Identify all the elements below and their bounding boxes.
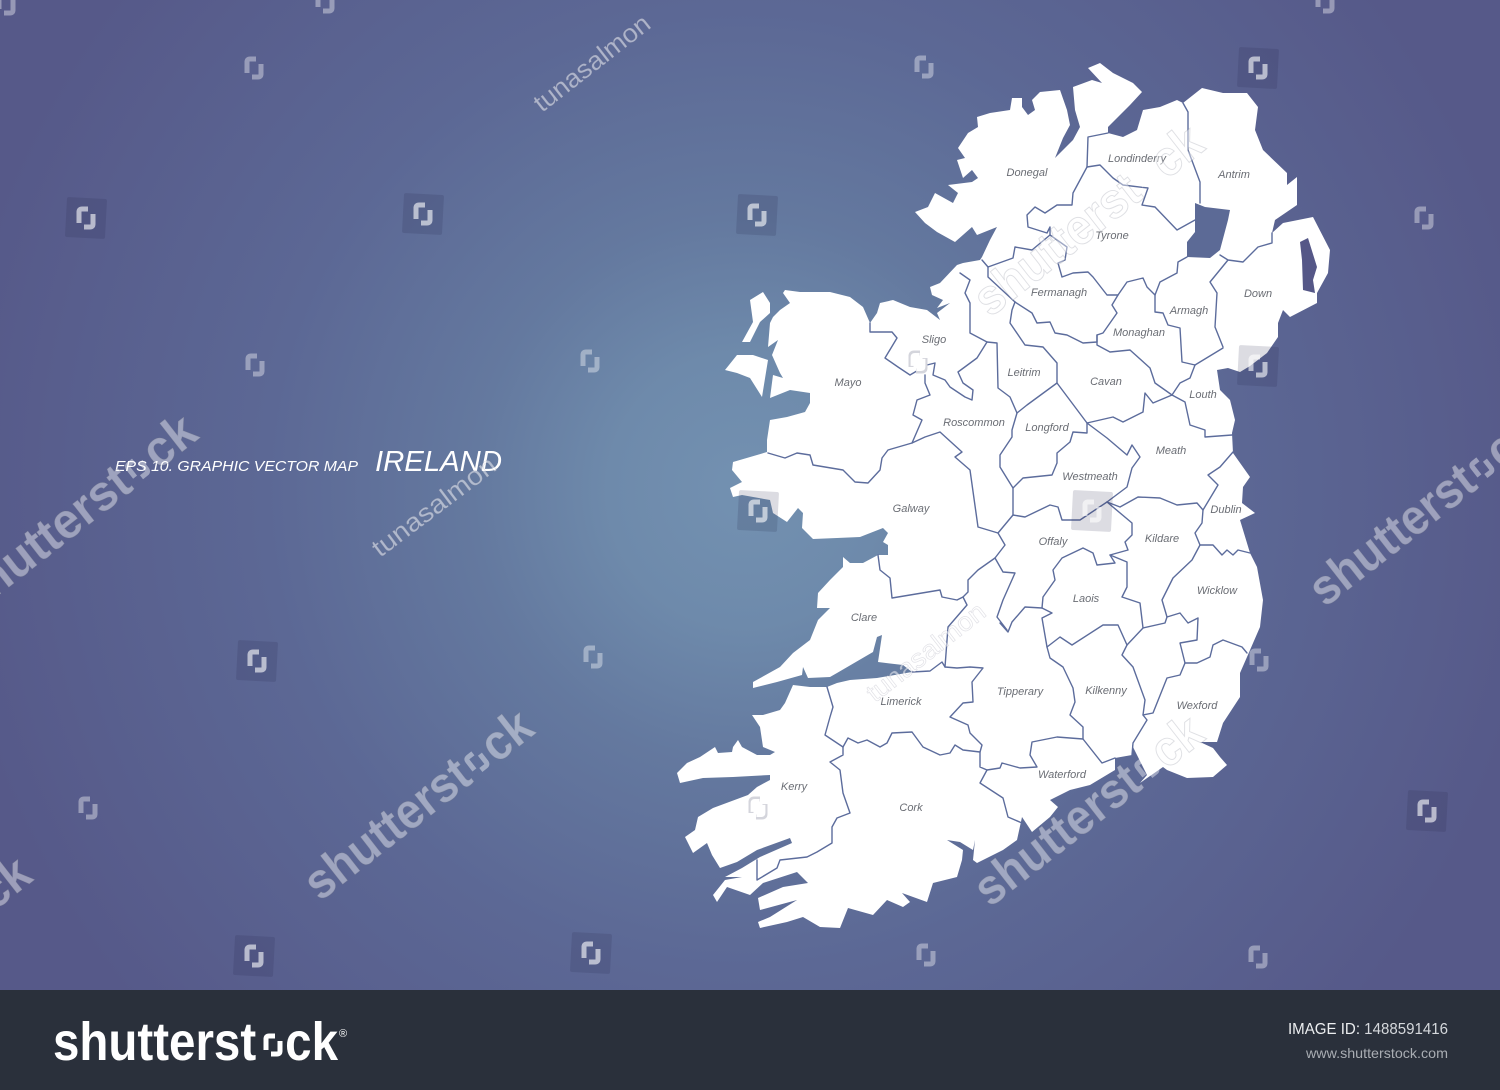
Achill Island — [725, 355, 768, 397]
county labels: Meath — [1156, 445, 1186, 457]
county labels: Kerry — [781, 781, 809, 793]
watermark: tunasalmon text: tunasalmon — [527, 8, 656, 118]
county labels: Clare — [851, 612, 877, 624]
county labels: Louth — [1189, 389, 1217, 401]
footer logo: ® — [339, 1028, 347, 1040]
footer logo: shutterstock — [53, 1012, 339, 1072]
county labels: Monaghan — [1113, 327, 1165, 339]
county labels: Antrim — [1217, 169, 1250, 181]
watermark: shutterstock text: shutterstock — [962, 703, 1214, 917]
county labels: Westmeath — [1062, 471, 1118, 483]
watermark: tunasalmon text: tunasalmon — [860, 596, 991, 708]
watermark: shutterstock text: shutterstock — [962, 113, 1214, 327]
county labels: Cork — [899, 802, 923, 814]
county labels: Kilkenny — [1085, 685, 1128, 697]
watermark: logo marks on land — [751, 353, 925, 817]
county labels: Dublin — [1210, 504, 1242, 516]
county labels: Galway — [893, 503, 931, 515]
Mullet Peninsula — [742, 292, 770, 342]
county labels: Laois — [1073, 593, 1100, 605]
county labels: Waterford — [1038, 769, 1087, 781]
county labels: Armagh — [1169, 305, 1208, 317]
county labels: Mayo — [835, 377, 861, 389]
map of Ireland — [677, 63, 1330, 928]
watermark: tunasalmon text — [366, 8, 991, 708]
county labels: Wexford — [1177, 700, 1218, 712]
landmass — [677, 63, 1330, 928]
county borders — [757, 103, 1272, 880]
title: map caption: IRELAND — [375, 446, 502, 478]
county labels: Londinderry — [1108, 153, 1168, 165]
watermark: tunasalmon text: tunasalmon — [366, 450, 502, 563]
county labels: Offaly — [1039, 536, 1069, 548]
website: www.shutterstock.com — [1305, 1045, 1448, 1061]
county labels: Leitrim — [1007, 367, 1041, 379]
county labels: Down — [1244, 288, 1272, 300]
footer bar — [0, 990, 1500, 1090]
image id: IMAGE ID: 1488591416 — [1288, 1021, 1448, 1038]
county labels: Fermanagh — [1031, 287, 1087, 299]
county labels: Tyrone — [1095, 230, 1129, 242]
county labels: Wicklow — [1197, 585, 1238, 597]
lake: Strangford Lough — [1300, 238, 1317, 293]
county labels: Limerick — [881, 696, 922, 708]
title: map caption — [115, 446, 502, 478]
county labels: Donegal — [1007, 167, 1048, 179]
county labels — [781, 153, 1272, 814]
watermark: shutterstock text: shutterstock — [292, 697, 544, 911]
county labels: Tipperary — [997, 686, 1045, 698]
lake: Lough Neagh — [1187, 203, 1230, 258]
watermark: boxed logo marks — [65, 47, 1448, 977]
county labels: Longford — [1025, 422, 1070, 434]
title: map caption: EPS 10. GRAPHIC VECTOR MAP — [115, 459, 358, 475]
county labels: Kildare — [1145, 533, 1179, 545]
county labels: Cavan — [1090, 376, 1122, 388]
county labels: Roscommon — [943, 417, 1005, 429]
county labels: Sligo — [922, 334, 946, 346]
